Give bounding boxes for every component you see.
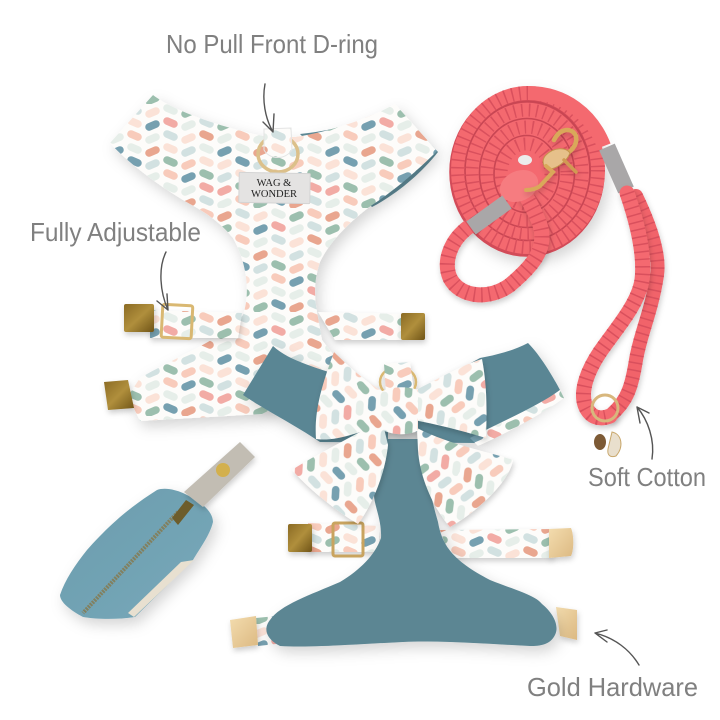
arrow to rope — [637, 407, 653, 459]
bow loop ring — [380, 367, 416, 397]
charm bronze — [594, 434, 606, 450]
bow lower left tail — [292, 420, 388, 524]
brand name line 2: WONDER — [251, 189, 297, 200]
velvet chest body — [266, 435, 557, 647]
tail strand front stripes — [583, 193, 643, 418]
brand name: WAG & — [257, 178, 291, 189]
hook body — [543, 149, 570, 169]
label: gold hardware — [527, 630, 698, 702]
bow upper right wing — [414, 359, 487, 438]
lower-left buckle — [104, 380, 134, 410]
snap hook — [526, 130, 576, 190]
tail strand front — [583, 193, 643, 418]
outer run to sleeve — [528, 93, 604, 146]
leather strap — [184, 442, 255, 507]
arrow to D-ring — [263, 84, 274, 132]
D-ring — [258, 136, 298, 172]
coil rings — [458, 93, 598, 247]
top harness: watercolor reversible side — [104, 95, 438, 421]
lower-left pale buckle — [230, 616, 258, 648]
coil shadow base — [457, 95, 597, 249]
bow loop — [384, 362, 414, 394]
label text: Fully Adjustable — [30, 217, 201, 247]
harness body — [110, 95, 437, 421]
strip of pattern below collar — [470, 390, 564, 446]
charm silver — [608, 432, 621, 457]
gold O-ring — [592, 395, 618, 421]
bow lower right tail — [417, 428, 513, 527]
pouch body — [60, 489, 213, 619]
leash clasp charm — [594, 432, 621, 457]
right upper strap — [318, 312, 402, 340]
poop bag pouch — [60, 442, 255, 619]
lower straps — [308, 523, 555, 558]
bow upper left wing — [316, 352, 384, 440]
bow knot — [378, 387, 418, 434]
tail strand back — [612, 196, 658, 414]
left upper strap — [150, 310, 242, 338]
handle loop stripes — [447, 182, 542, 295]
label text: Soft Cotton — [588, 462, 706, 492]
dark gaps between coil rings — [465, 102, 590, 240]
velvet collar — [243, 343, 560, 443]
brand patch — [239, 172, 310, 204]
arrow to buckle — [595, 630, 639, 665]
handle loop — [447, 182, 542, 295]
label: fully adjustable — [30, 217, 201, 310]
label text: No Pull Front D-ring — [166, 29, 378, 59]
grey collar strip — [388, 432, 418, 439]
front strap loop — [264, 128, 292, 158]
sailor bow — [292, 352, 513, 527]
zipper tape — [83, 512, 178, 613]
teal lining sliver — [300, 105, 438, 207]
right side-release buckle — [401, 313, 425, 340]
label: no pull front D-ring — [166, 29, 378, 132]
lower harness: teal velvet side — [230, 343, 577, 648]
patch background — [239, 172, 310, 204]
zipper pull — [172, 500, 194, 525]
lower-left tab — [256, 616, 276, 646]
hook lower arm — [526, 166, 553, 190]
inner grey sleeve — [471, 202, 507, 228]
hook ring — [554, 130, 576, 157]
brass snap — [216, 463, 230, 477]
lower-right pale buckle — [556, 607, 577, 640]
outer grey sleeve — [607, 147, 626, 190]
left strap buckle — [288, 524, 312, 552]
left slider buckle — [161, 304, 193, 339]
left side-release buckle — [124, 304, 154, 332]
pouch label tag — [128, 560, 194, 617]
hook trigger — [564, 160, 576, 172]
tail strand back stripes — [612, 196, 658, 414]
label text: Gold Hardware — [527, 672, 698, 702]
centre hole — [518, 155, 532, 165]
label: soft cotton — [588, 407, 706, 492]
coil twist stripes — [458, 93, 598, 247]
coral rope leash — [447, 93, 658, 457]
right strap buckle — [549, 528, 573, 558]
arrow to slider — [157, 252, 168, 310]
knot — [495, 164, 543, 208]
slider buckle — [333, 523, 363, 556]
